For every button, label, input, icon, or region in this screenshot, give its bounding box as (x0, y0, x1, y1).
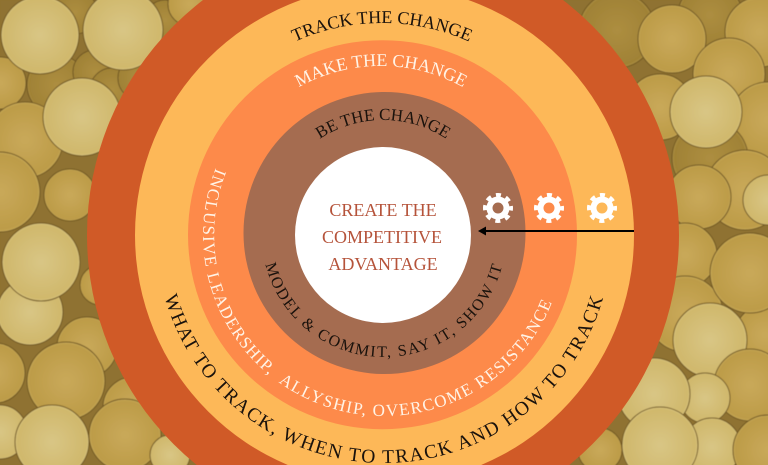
core text: create the competitive advantage: CREATE THE (329, 200, 437, 220)
core text: create the competitive advantage: ADVANTAGE (328, 254, 438, 274)
icon: gear on orange ring (536, 195, 562, 221)
label: model and commit: MODEL & COMMIT, SAY IT, SHOW IT (266, 262, 502, 360)
icon: gear on brown ring (485, 195, 511, 221)
heading: make the change: MAKE THE CHANGE (294, 54, 468, 87)
ring: track the change (outer) (87, 0, 679, 465)
ring: track the change (band) (135, 0, 634, 465)
core text: create the competitive advantage (322, 200, 442, 274)
core text: create the competitive advantage: COMPETITIVE (322, 227, 442, 247)
heading: be the change: BE THE CHANGE (314, 108, 451, 139)
label: inclusive leadership: INCLUSIVE LEADERSHIP, ALLYSHIP, OVERCOME RESISTANCE (203, 168, 552, 418)
arrow: pointing to the core (478, 226, 634, 236)
ring: be the change (244, 92, 526, 374)
core circle (295, 147, 471, 323)
ring: make the change (188, 40, 577, 429)
label: what to track: WHAT TO TRACK, WHEN TO TRACK AND HOW TO TRACK (166, 292, 603, 463)
icon: gear on yellow ring (589, 195, 615, 221)
heading: track the change: TRACK THE CHANGE (290, 11, 472, 42)
